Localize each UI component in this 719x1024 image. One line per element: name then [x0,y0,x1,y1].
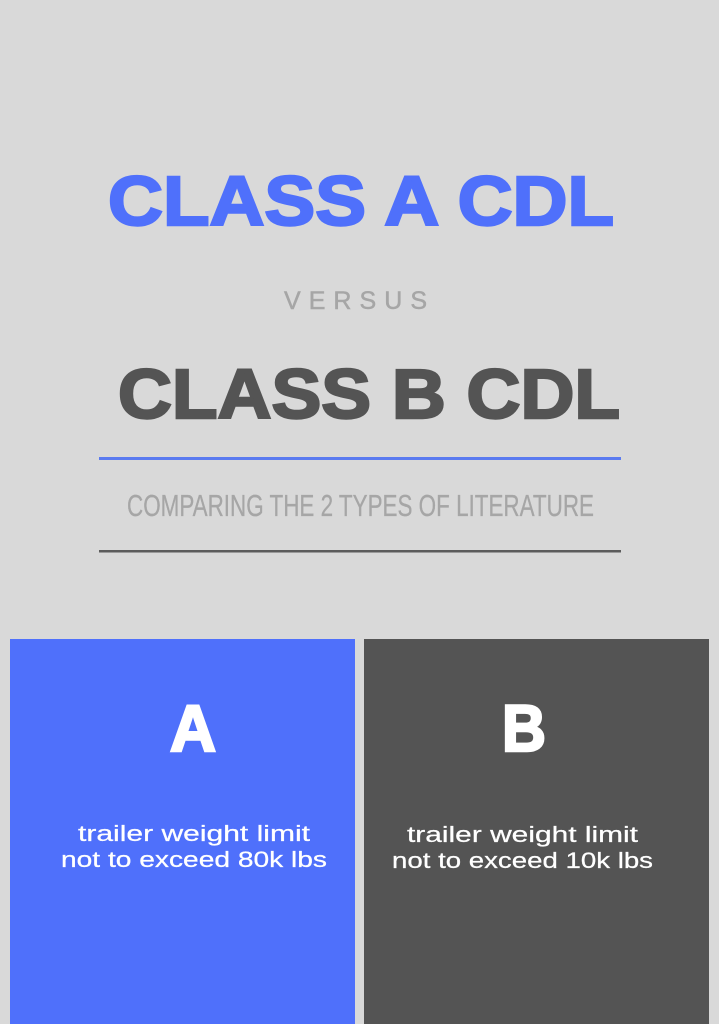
class A description: not to exceed 80k lbs [61,847,327,872]
class B description: trailer weight limit [407,822,638,847]
title: class A CDL: CLASS A CDL [108,162,614,240]
title: class B CDL: CLASS B CDL [118,355,620,433]
class A description [61,821,327,872]
panel letter A: A [170,691,216,765]
class B description: not to exceed 10k lbs [392,848,653,873]
class A description: trailer weight limit [78,821,310,846]
panel: class A [10,639,355,1024]
versus label: VERSUS [284,287,427,315]
panel: class B [364,639,709,1024]
panel letter B: B [502,691,546,765]
class B description [392,822,653,873]
